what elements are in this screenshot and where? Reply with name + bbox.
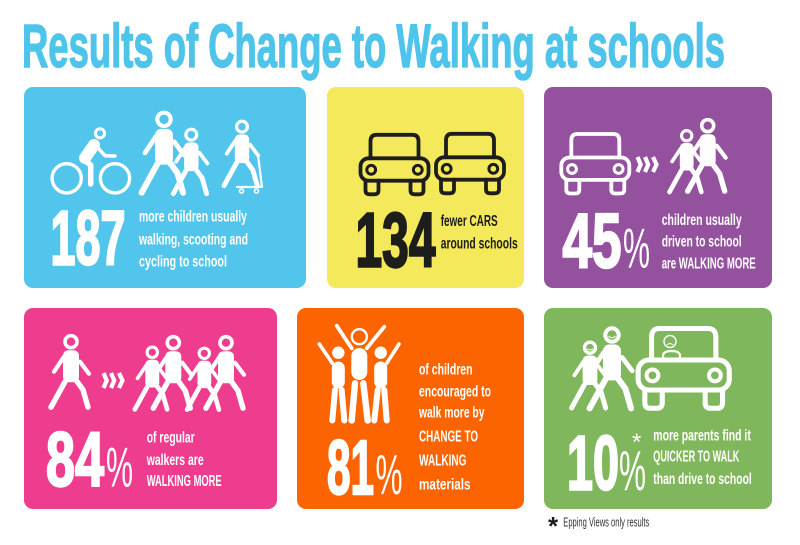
number: 81: 81	[327, 425, 374, 511]
text: children encouraged: of children	[419, 361, 472, 378]
footnote: *	[548, 511, 559, 541]
text: fewer cars: fewer CARS	[441, 213, 498, 230]
panel: 187 more children	[24, 87, 306, 288]
icon: adult walking	[142, 113, 184, 193]
icon: child on scooter	[224, 121, 262, 193]
icon: car with unhappy driver	[638, 329, 729, 408]
icon: cheering group	[319, 326, 399, 420]
footnote	[548, 511, 650, 541]
text: children driven: driven to school	[662, 234, 742, 251]
text: more children: walking, scooting and	[138, 231, 248, 248]
icon: car right	[436, 134, 504, 193]
text: regular walkers: WALKING MORE	[147, 473, 222, 490]
panel: 81 percent	[297, 308, 524, 511]
text: children encouraged: materials	[419, 476, 471, 493]
text: more children	[138, 209, 248, 271]
percent sign: %	[619, 439, 646, 503]
number: 10: 10	[567, 420, 619, 506]
number: 134: 134	[356, 198, 436, 284]
icon: arrows	[104, 373, 122, 388]
panel: 134 fewer cars	[327, 87, 524, 288]
text: regular walkers	[146, 429, 222, 490]
percent sign: %	[106, 436, 133, 500]
text: children driven	[662, 212, 756, 273]
icon: child walking	[670, 131, 702, 192]
text: parents quicker: more parents find it	[653, 428, 751, 445]
footnote: Epping Views only results	[563, 515, 650, 530]
panel: 10 percent	[544, 308, 772, 509]
text: children encouraged: WALKING	[419, 453, 466, 470]
panel: 45 percent	[544, 87, 772, 288]
panel: 84 percent	[24, 308, 277, 509]
icon: cyclist	[52, 129, 130, 193]
number: 45: 45	[562, 198, 622, 284]
icon: happy child walking	[572, 342, 607, 408]
asterisk: *	[632, 429, 641, 456]
text: children encouraged: encouraged to	[419, 384, 491, 401]
icon: child walking	[173, 129, 208, 194]
text: regular walkers: walkers are	[146, 452, 204, 469]
text: children encouraged	[418, 361, 491, 493]
icon: adult walking	[688, 120, 726, 191]
text: children encouraged: walk more by	[418, 405, 485, 422]
icon: car	[561, 134, 629, 194]
number: 187: 187	[50, 196, 126, 282]
text: more children: more children usually	[139, 209, 247, 226]
text: more children: cycling to school	[139, 254, 227, 271]
icon: car left	[360, 135, 428, 194]
text: parents quicker	[653, 428, 752, 488]
icon: group of walkers	[135, 337, 244, 410]
percent sign: %	[623, 216, 650, 280]
number: 84: 84	[46, 417, 104, 503]
text: children encouraged: CHANGE TO	[419, 429, 478, 446]
icon: happy adult walking	[590, 328, 632, 408]
text: children driven: children usually	[662, 212, 742, 229]
text: fewer cars	[441, 213, 518, 252]
icon: arrows	[638, 157, 656, 172]
text: fewer cars: around schools	[441, 235, 518, 252]
icon: single walker	[51, 336, 89, 407]
percent sign: %	[376, 443, 402, 507]
text: regular walkers: of regular	[147, 429, 195, 446]
